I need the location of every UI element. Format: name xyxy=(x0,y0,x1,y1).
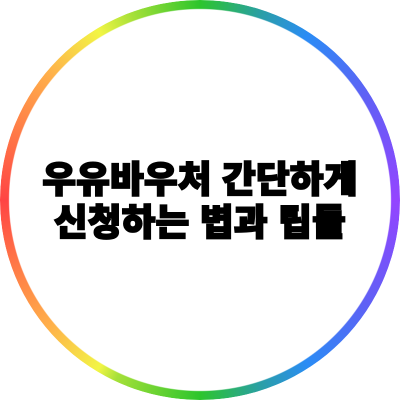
title line 2: 신청하는 볍과 팁들 xyxy=(54,202,346,243)
title line 1: 우유바우처 간단하게 xyxy=(42,159,358,200)
title xyxy=(42,159,358,243)
